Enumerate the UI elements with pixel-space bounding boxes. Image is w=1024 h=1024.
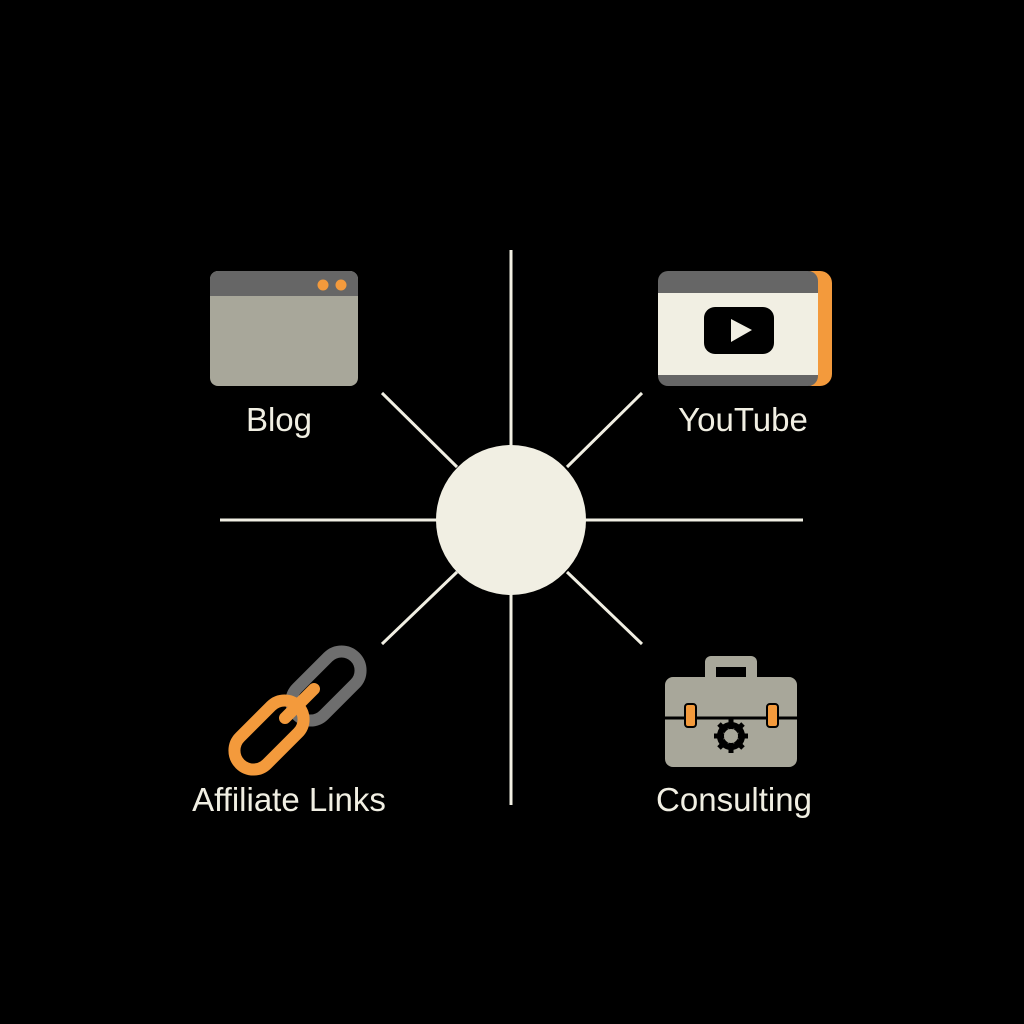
label: YouTube: YouTube [678, 401, 808, 438]
label: Affiliate Links: Affiliate Links [192, 781, 386, 818]
label: Blog: Blog [246, 401, 312, 438]
icon: briefcase with gear [665, 656, 797, 767]
label: Consulting: Consulting [656, 781, 812, 818]
center hub circle [436, 445, 586, 595]
icon: chain links [227, 644, 368, 777]
icon: YouTube player [658, 271, 832, 386]
connector lines [220, 250, 803, 805]
icon: blog browser window [210, 271, 358, 386]
